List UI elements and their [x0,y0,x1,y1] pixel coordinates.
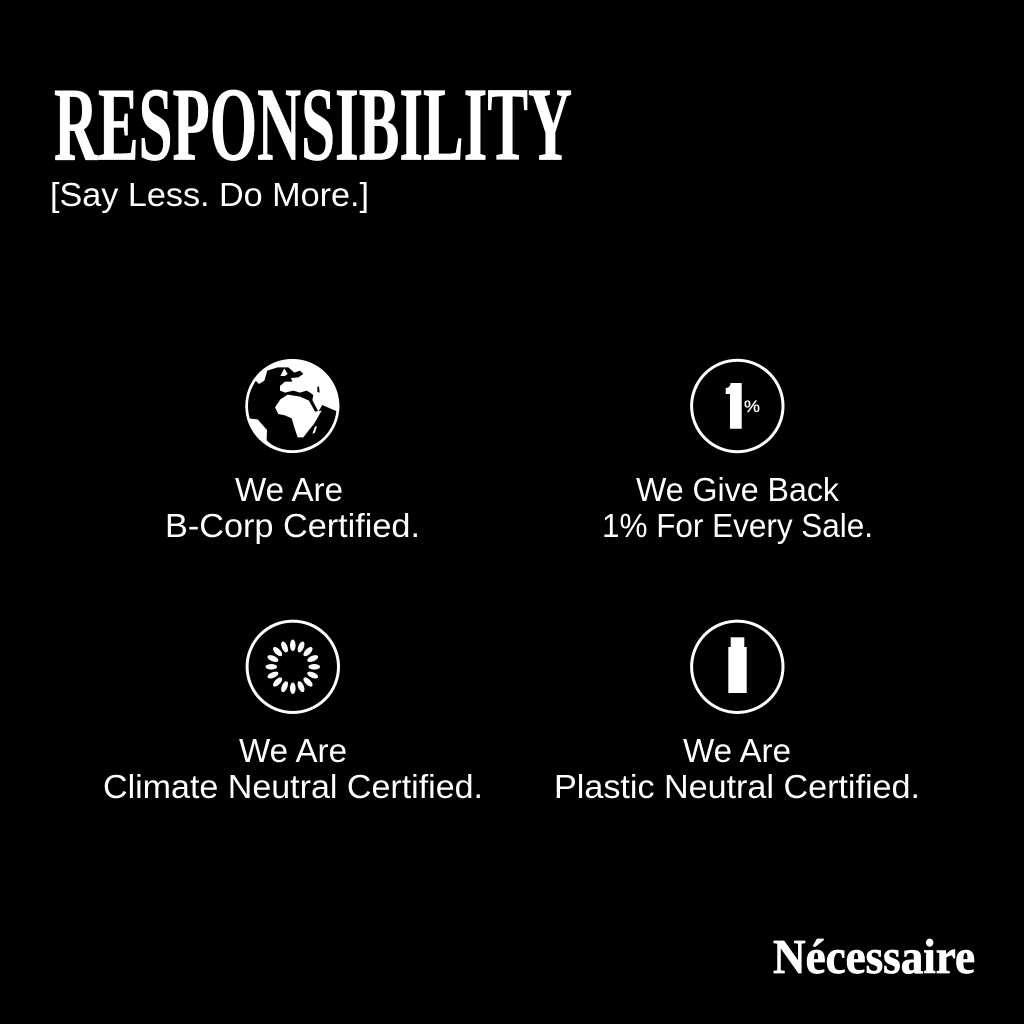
panel: plastic neutral [554,621,920,805]
label: We Are [239,732,347,769]
label [554,732,920,805]
icon: bottle [692,621,783,712]
panel: climate neutral [103,621,483,805]
label [602,471,873,544]
label: B-Corp Certified. [165,507,420,544]
label: We Are [683,732,791,769]
title: RESPONSIBILITY [54,66,572,182]
label: Plastic Neutral Certified. [554,768,920,805]
label [103,732,483,805]
label: 1% For Every Sale. [602,507,873,544]
icon: sunburst [247,621,338,712]
label: We Give Back [636,471,839,508]
panel: b-corp [165,359,420,544]
icon: one percent [692,360,783,452]
label: Climate Neutral Certified. [103,768,483,805]
subtitle: [Say Less. Do More.] [50,176,369,213]
panel: give back [602,360,873,544]
brand logo: Nécessaire [773,929,975,984]
label [165,471,420,544]
icon: globe [245,359,339,453]
label: We Are [235,471,343,508]
icon: one percent: % [744,397,760,416]
